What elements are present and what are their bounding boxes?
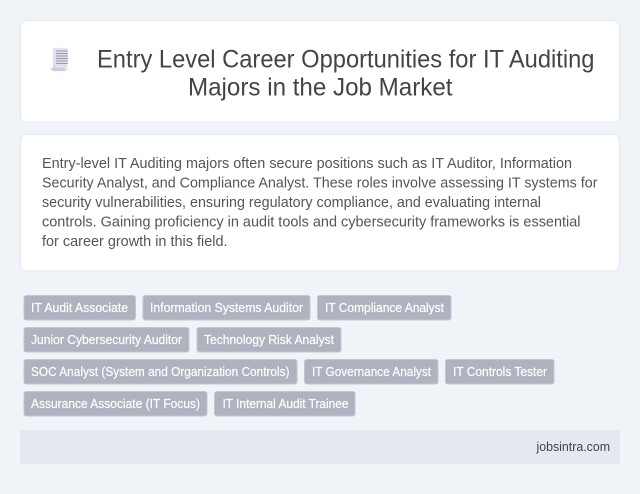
- tag: IT Controls Tester: IT Controls Tester: [453, 365, 547, 379]
- title text: [97, 46, 594, 102]
- tag: IT Governance Analyst: [304, 360, 438, 384]
- tag: Junior Cybersecurity Auditor: [24, 328, 189, 352]
- tag: SOC Analyst: SOC Analyst (System and Organization Controls): [31, 365, 290, 379]
- panel: title card: [20, 20, 620, 122]
- tag: IT Internal Audit Trainee: [214, 392, 355, 416]
- tag: Information Systems Auditor: [143, 296, 310, 320]
- icon: audit document: [51, 48, 68, 71]
- tag: Technology Risk Analyst: Technology Risk Analyst: [204, 333, 335, 347]
- description text: Security Analyst, and Compliance Analyst. These roles involve assessing IT systems for: [42, 176, 598, 192]
- footer bar: [20, 430, 620, 464]
- tag: IT Governance Analyst: IT Governance Analyst: [312, 365, 431, 379]
- description text: for career growth in this field.: [42, 234, 228, 250]
- tag: Assurance Associate (IT Focus): Assurance Associate (IT Focus): [31, 397, 200, 411]
- tag: IT Compliance Analyst: IT Compliance Analyst: [325, 301, 444, 315]
- tag: IT Audit Associate: [24, 296, 136, 320]
- title text: Entry Level Career Opportunities for IT Auditing: [97, 46, 594, 74]
- tag: IT Compliance Analyst: [318, 296, 451, 320]
- title text: Majors in the Job Market: [188, 74, 453, 102]
- panel: description card: [20, 134, 620, 271]
- tag: Technology Risk Analyst: [197, 328, 341, 352]
- tag: IT Internal Audit Trainee: IT Internal Audit Trainee: [222, 397, 349, 411]
- description text: Entry-level IT Auditing majors often secure positions such as IT Auditor, Information: [42, 156, 572, 172]
- tag: IT Audit Associate: IT Audit Associate: [31, 301, 128, 315]
- tag list: [24, 296, 554, 416]
- tag: Assurance Associate (IT Focus): [24, 392, 207, 416]
- description text: security vulnerabilities, ensuring regulatory compliance, and evaluating internal: [42, 195, 541, 211]
- description text: controls. Gaining proficiency in audit tools and cybersecurity frameworks is essential: [42, 214, 580, 230]
- tag: IT Controls Tester: [446, 360, 554, 384]
- description text: [42, 156, 598, 250]
- tag: Information Systems Auditor: Information Systems Auditor: [150, 301, 303, 315]
- tag: SOC Analyst: [24, 360, 297, 384]
- tag: Junior Cybersecurity Auditor: Junior Cybersecurity Auditor: [31, 333, 182, 347]
- footer source text: jobsintra.com: [536, 440, 610, 454]
